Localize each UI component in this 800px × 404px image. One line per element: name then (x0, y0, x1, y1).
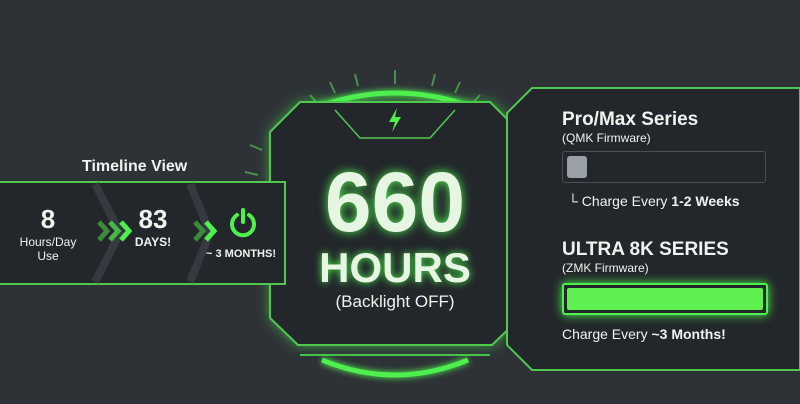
stat: 8 hours: 8 (41, 204, 55, 234)
icon: bolt (389, 108, 401, 132)
sub: qmk: (QMK Firmware) (562, 131, 651, 145)
panel: center 660 hours (316, 108, 475, 311)
label: backlight off: (Backlight OFF) (335, 292, 455, 311)
stat: 83 days (135, 204, 171, 249)
panel shape: right (507, 88, 800, 370)
arrow: chevrons 1 (97, 220, 132, 242)
panel shape: center (270, 102, 520, 345)
heading: ultra 8k: ULTRA 8K SERIES (562, 239, 729, 260)
panel shape: left (0, 182, 285, 284)
panel: comparison (554, 109, 776, 342)
stat: 83 days: 83 (139, 204, 167, 234)
big number: 660 (325, 155, 465, 249)
text: charge 3 months: Charge Every ~3 Months! (562, 326, 726, 342)
sub: zmk: (ZMK Firmware) (562, 261, 649, 275)
stat: 3 months: ~ 3 MONTHS! (206, 248, 276, 260)
icon: power (230, 208, 256, 238)
stat: 83 days: DAYS! (135, 235, 171, 249)
bar: ultra battery (562, 283, 768, 315)
arrow: chevrons 2 (193, 220, 218, 242)
stat: 8 hours: Hours/Day (20, 235, 76, 249)
heading: timeline view: Timeline View (82, 158, 187, 175)
stat: 8 hours (20, 204, 76, 263)
heading: pro/max: Pro/Max Series (562, 109, 698, 130)
stat: 8 hours: Use (37, 249, 59, 263)
panel: timeline (20, 204, 276, 263)
bar: pro/max battery (562, 151, 766, 183)
label: hours: HOURS (319, 244, 471, 291)
text: charge 1-2 weeks: └ Charge Every 1-2 Weeks (568, 193, 740, 209)
